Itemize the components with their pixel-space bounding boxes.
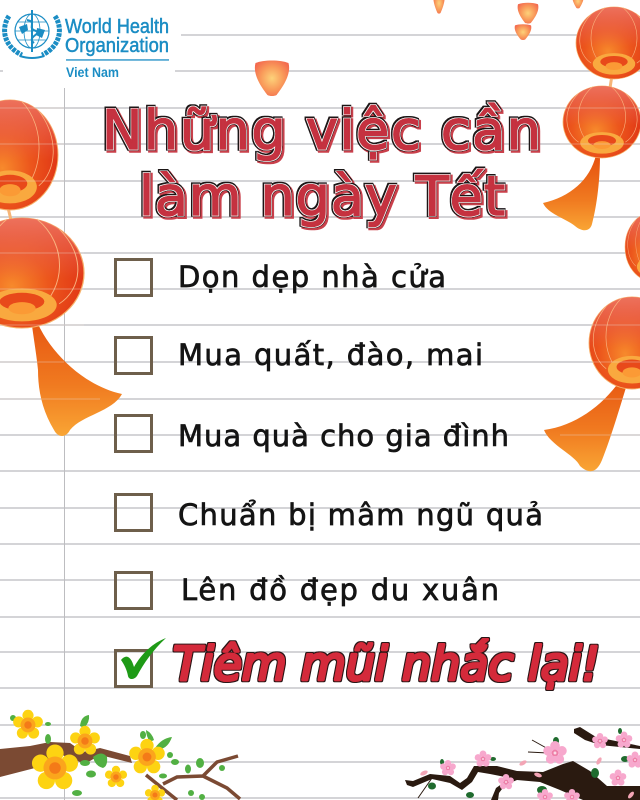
item 2: checkbox and text: Mua quất, đào, mai: [178, 338, 483, 372]
logo: World Health Organization Viet Nam: Viet Nam: [66, 65, 119, 80]
icon: green check mark: [121, 638, 166, 679]
title: [102, 99, 541, 228]
checklist: [116, 260, 600, 691]
logo: World Health Organization Viet Nam: Organization: [65, 35, 169, 57]
logo text: World Health: [65, 16, 169, 38]
item 6: checked box and highlighted text: Tiêm mũi nhắc lại!: [173, 637, 600, 691]
icon: WHO emblem: [5, 10, 59, 58]
item 3: checkbox and text: Mua quà cho gia đình: [178, 419, 509, 453]
item 5: checkbox and text: Lên đồ đẹp du xuân: [181, 573, 499, 607]
icon: sky lanterns: [255, 0, 584, 96]
item 1: checkbox and text: Dọn dẹp nhà cửa: [178, 260, 446, 294]
item 4: checkbox and text: Chuẩn bị mâm ngũ quả: [178, 498, 543, 532]
icon: pink blossom branch: [405, 727, 640, 800]
title: Những việc cần: [102, 99, 541, 162]
icon: yellow apricot blossom branch: [0, 710, 240, 800]
logo: World Health Organization Viet Nam: [5, 10, 169, 80]
icon: left hanging lanterns: [0, 100, 122, 436]
title: làm ngày Tết: [139, 165, 505, 228]
faint notebook lines over lanterns: [0, 108, 640, 435]
icon: right hanging lanterns: [543, 7, 640, 471]
